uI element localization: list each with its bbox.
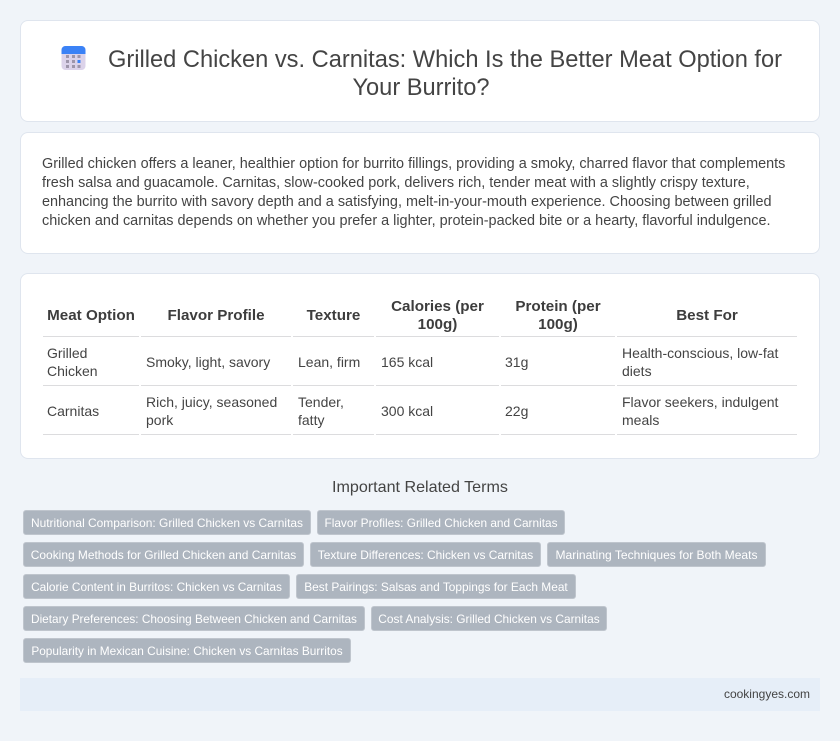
related terms tags: Cooking Methods for Grilled Chicken and Carnitas	[31, 548, 296, 562]
heading: related terms: Important Related Terms	[332, 478, 508, 496]
table row: carnitas: fatty	[298, 412, 324, 428]
table header: Calories (per	[391, 298, 484, 315]
footer source text: cookingyes.com	[724, 687, 810, 701]
table row: grilled chicken: 31g	[505, 354, 528, 370]
table row: carnitas: Flavor seekers, indulgent	[622, 394, 778, 410]
related terms tags: Nutritional Comparison: Grilled Chicken vs Carnitas	[31, 516, 303, 530]
footer	[20, 678, 820, 711]
related terms tags: Cost Analysis: Grilled Chicken vs Carnitas	[378, 612, 600, 626]
panel: introduction	[20, 132, 820, 254]
related terms tags: Popularity in Mexican Cuisine: Chicken vs Carnitas Burritos	[31, 644, 343, 658]
related terms tags: Texture Differences: Chicken vs Carnitas	[318, 548, 533, 562]
table row: carnitas	[47, 394, 778, 428]
table header: Texture	[307, 307, 360, 324]
table header: Meat Option	[47, 307, 135, 324]
related terms tags: Best Pairings: Salsas and Toppings for Each Meat	[304, 580, 568, 594]
intro paragraph: enhancing the burrito with savory depth and a satisfying, melt-in-your-mouth experience. Choosing between grilled	[42, 194, 772, 210]
related terms tags: Flavor Profiles: Grilled Chicken and Carnitas	[324, 516, 558, 530]
table row: grilled chicken: 165 kcal	[381, 354, 433, 370]
table row: grilled chicken: Lean, firm	[298, 354, 360, 370]
table row: grilled chicken	[47, 345, 778, 379]
table row: carnitas: 22g	[505, 403, 528, 419]
table row: grilled chicken: Grilled	[47, 345, 87, 361]
related terms tags: Marinating Techniques for Both Meats	[555, 548, 758, 562]
title	[108, 47, 782, 101]
table row: carnitas: pork	[146, 412, 173, 428]
table header: 100g)	[418, 316, 457, 333]
panel: title card	[20, 20, 820, 122]
intro paragraph: Grilled chicken offers a leaner, healthier option for burrito fillings, providing a smoky, charred flavor that complements	[42, 156, 785, 172]
table row: grilled chicken: diets	[622, 363, 652, 379]
table row: carnitas: Carnitas	[47, 403, 99, 419]
table row: carnitas: 300 kcal	[381, 403, 433, 419]
table header: 100g)	[538, 316, 578, 333]
table row: carnitas: Tender,	[298, 394, 344, 410]
table row: grilled chicken: Smoky, light, savory	[146, 354, 270, 370]
title: Grilled Chicken vs. Carnitas: Which Is the Better Meat Option for	[108, 47, 782, 73]
intro paragraph	[42, 156, 785, 229]
table header: Protein (per	[515, 298, 601, 315]
table row: carnitas: meals	[622, 412, 659, 428]
table row: grilled chicken: Chicken	[47, 363, 98, 379]
related terms tags	[23, 510, 766, 663]
related terms tags: Calorie Content in Burritos: Chicken vs Carnitas	[31, 580, 282, 594]
table row: grilled chicken: Health-conscious, low-fat	[622, 345, 778, 361]
intro paragraph: fresh salsa and guacamole. Carnitas, slow-cooked pork, delivers rich, tender meat with a slightly crispy texture,	[42, 175, 750, 191]
table header: Best For	[676, 307, 738, 324]
table header: Flavor Profile	[167, 307, 265, 324]
table header	[47, 298, 738, 333]
panel: comparison table	[20, 273, 820, 459]
icon: calendar	[62, 46, 86, 70]
intro paragraph: chicken and carnitas depends on whether you prefer a lighter, protein-packed bite or a hearty, flavorful indulgence.	[42, 213, 770, 229]
table row: carnitas: Rich, juicy, seasoned	[146, 394, 277, 410]
title: Your Burrito?	[352, 75, 490, 101]
related terms tags: Dietary Preferences: Choosing Between Chicken and Carnitas	[31, 612, 357, 626]
